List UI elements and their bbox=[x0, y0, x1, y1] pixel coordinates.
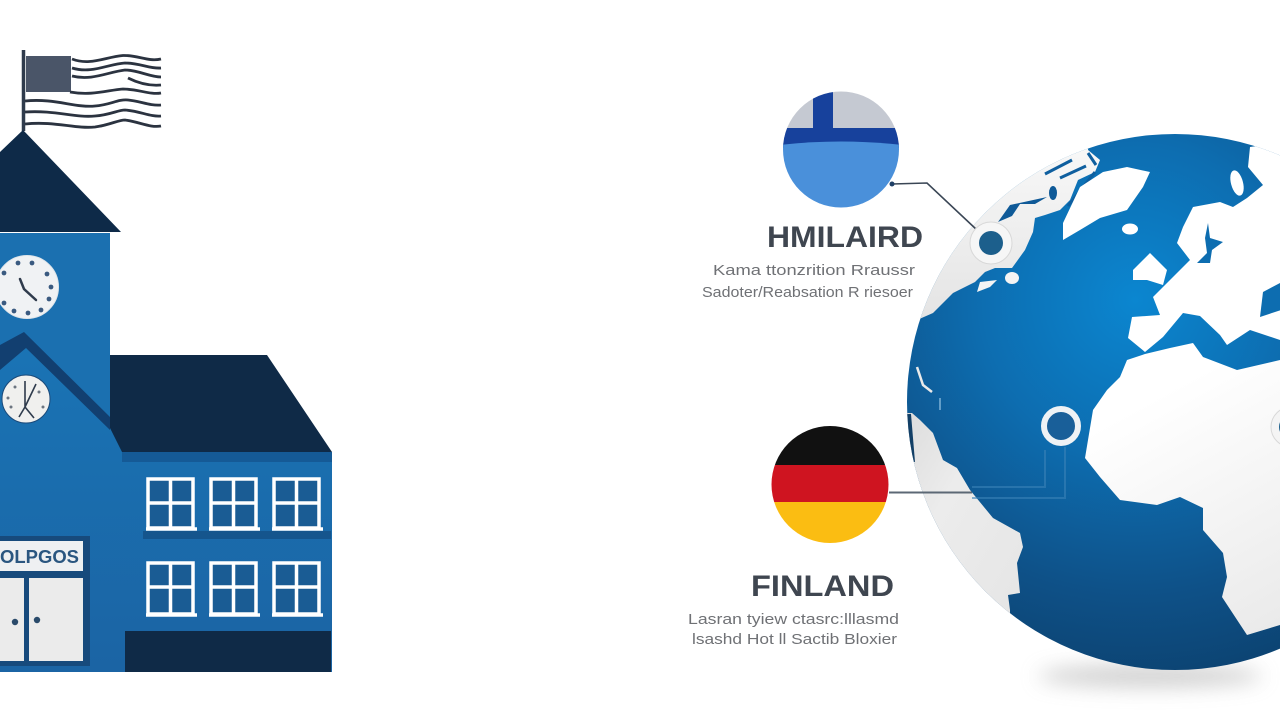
baffin inlet bbox=[1049, 186, 1057, 200]
upper row of windows bbox=[146, 479, 323, 529]
gable clock bbox=[2, 375, 50, 423]
main wall bbox=[0, 337, 332, 672]
lower description line 1: Lasran tyiew ctasrc:lllasmd bbox=[688, 611, 899, 628]
lower description line 2: lsashd Hot ll Sactib Bloxier bbox=[692, 631, 897, 648]
north america bbox=[920, 148, 1100, 318]
globe shadow bbox=[1038, 665, 1262, 687]
top description line 1: Kama ttonzrition Rraussr bbox=[713, 262, 915, 279]
black band bbox=[774, 426, 885, 465]
school building illustration bbox=[0, 50, 332, 672]
flag field bbox=[783, 92, 899, 144]
gable trim bbox=[0, 332, 110, 430]
flag stripes bbox=[25, 55, 161, 127]
flag pole bbox=[22, 50, 25, 131]
arctic island bbox=[1230, 170, 1244, 196]
continents bbox=[907, 146, 1280, 635]
plinth bbox=[125, 631, 331, 672]
connector: top flag to globe marker bbox=[892, 183, 977, 230]
horizontal cross bar bbox=[780, 128, 902, 148]
window bbox=[209, 563, 260, 615]
window bbox=[146, 479, 197, 529]
lower blue field bbox=[780, 142, 902, 210]
connector inside globe: light bbox=[972, 450, 1045, 487]
tower clock bbox=[0, 256, 58, 318]
window shadow band bbox=[143, 531, 331, 539]
baltic sea bbox=[1197, 223, 1223, 263]
greenland bbox=[1063, 167, 1150, 240]
wall shadow under the roof bbox=[122, 452, 332, 462]
british isles bbox=[1133, 253, 1167, 285]
flag on the tower bbox=[24, 50, 161, 131]
door frame bbox=[0, 536, 90, 666]
window bbox=[209, 479, 260, 529]
faint island dash bbox=[939, 398, 941, 410]
sign text: OLPGOS bbox=[0, 547, 79, 567]
italy bbox=[1203, 308, 1230, 340]
iceland bbox=[1122, 224, 1138, 234]
main roof bbox=[110, 355, 332, 452]
arctic channels bbox=[1045, 153, 1096, 206]
central america sliver bbox=[917, 367, 932, 392]
hudson bay bbox=[998, 197, 1047, 222]
tower wall bbox=[0, 233, 110, 433]
window bbox=[146, 563, 197, 615]
connector: lower flag to globe bbox=[889, 492, 972, 494]
gold band bbox=[770, 502, 890, 544]
globe bbox=[880, 120, 1280, 670]
right globe marker bbox=[1271, 407, 1280, 447]
top description line 2: Sadoter/Reabsation R riesoer bbox=[702, 284, 913, 301]
flag canton bbox=[26, 56, 71, 92]
tower roof bbox=[0, 130, 121, 232]
dark coastal rim bbox=[909, 414, 913, 462]
africa bbox=[1085, 343, 1280, 635]
sign panel bbox=[0, 541, 83, 571]
lower row of windows bbox=[146, 563, 323, 615]
connector inside globe: dark bbox=[972, 447, 1065, 498]
finland flag circle bbox=[780, 90, 902, 210]
ocean bbox=[907, 134, 1280, 670]
caribbean islands bbox=[977, 272, 1019, 292]
vertical cross bar bbox=[813, 92, 833, 128]
right door bbox=[29, 578, 83, 661]
door knobs bbox=[12, 617, 40, 625]
left door bbox=[0, 578, 24, 661]
entrance bbox=[0, 536, 90, 666]
eurasia bbox=[1128, 140, 1280, 352]
germany flag circle bbox=[770, 425, 890, 544]
connector dot bbox=[890, 182, 894, 186]
top globe marker bbox=[970, 222, 1012, 264]
window bbox=[272, 479, 323, 529]
middle globe marker bbox=[1044, 409, 1078, 443]
window bbox=[272, 563, 323, 615]
lower country label: FINLAND bbox=[751, 570, 894, 603]
red band bbox=[770, 465, 890, 502]
top country label: HMILAIRD bbox=[767, 221, 923, 254]
south america bbox=[907, 413, 1023, 613]
black sea bbox=[1260, 283, 1280, 317]
